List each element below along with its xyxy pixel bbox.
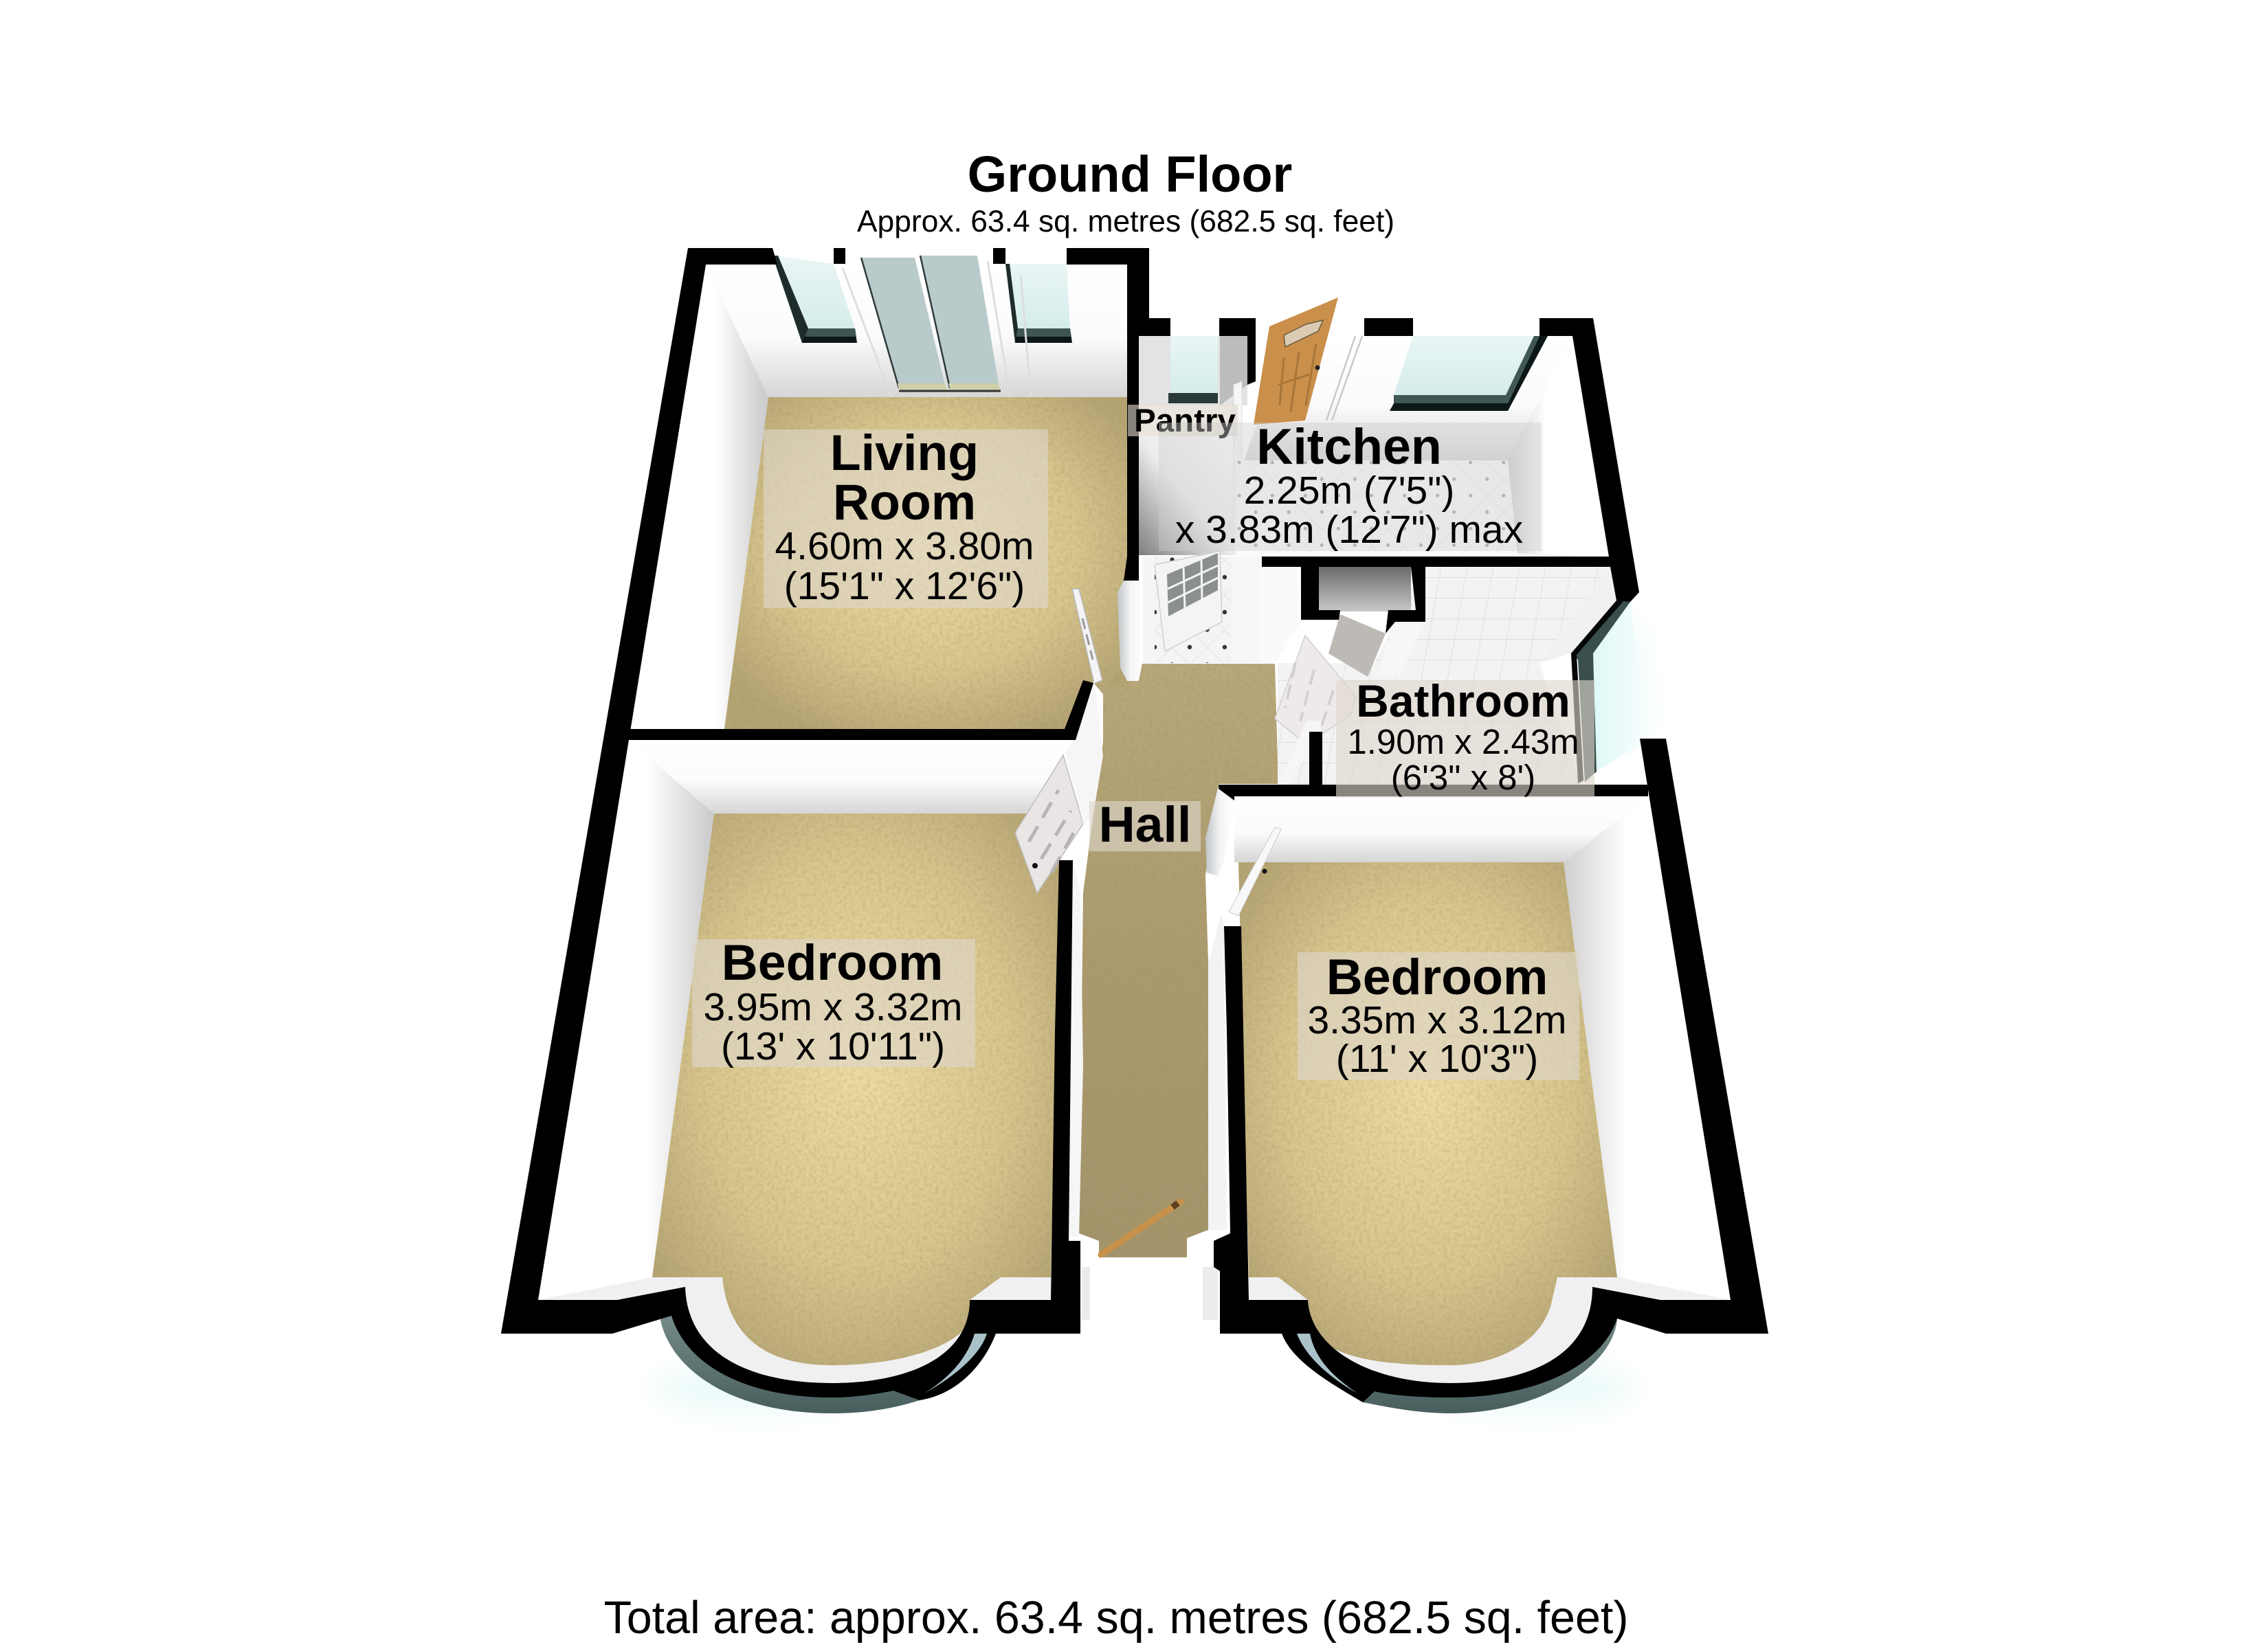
subtitle: floor area: Approx. 63.4 sq. metres (682.5 sq. feet) [857,205,1394,238]
exterior and interior black walls [501,248,1768,1402]
label: kitchen: Kitchen [1256,418,1442,475]
bedroom two right wall [1564,796,1731,1300]
bathroom window [1571,601,1648,783]
room: inner lobby and door [1118,551,1262,681]
bedroom one wall edge [1069,860,1083,1237]
label: bedroom two: 3.35m x 3.12m [1307,998,1567,1042]
label: bathroom [1336,675,1594,798]
cupboard front [1376,622,1425,677]
room: pantry [1139,336,1247,555]
label: bedroom one [692,934,975,1068]
room: bathroom [1261,567,1648,785]
label: living room: (15'1" x 12'6") [784,564,1025,608]
wall: bedroom two outer wall [1214,739,1768,1402]
wall: living room top right [1067,248,1149,265]
pantry lower wall [1139,436,1234,555]
living room back wall [706,265,1127,397]
wall: top stub right of patio door [993,248,1005,264]
label: living room [764,424,1048,608]
room: bedroom one [538,680,1103,1383]
label: kitchen: x 3.83m (12'7") max [1175,508,1523,552]
room: hall [1079,664,1278,1320]
wall: between living room and bedroom one [628,680,1093,740]
label: kitchen: 2.25m (7'5") [1244,469,1454,513]
hall door jamb [1205,788,1234,876]
label: bathroom: Bathroom [1356,675,1570,726]
pantry back wall [1139,336,1247,405]
bedroom one back wall [629,741,1062,814]
pantry door leaf [1234,381,1242,555]
label: living room: Living [830,424,979,481]
living room left wall [630,265,768,729]
bedroom two bay wall [1249,1277,1731,1383]
wall: top stub at patio door [834,248,845,264]
wall: cupboard [1301,567,1425,633]
pantry window [1168,336,1218,403]
bathroom tiled floor [1278,663,1581,785]
kitchen window [1390,326,1548,411]
patio doors [843,256,1031,397]
wall: central spine upper [1127,265,1149,336]
right window [1005,264,1072,343]
label: bedroom one: 3.95m x 3.32m [703,985,963,1029]
hall end jamb right [1203,1267,1218,1320]
label: bedroom two: (11' x 10'3") [1336,1037,1538,1081]
bedroom one door wall end [1065,680,1103,824]
bay window glass: bedroom one [660,1305,920,1413]
wall: kitchen top stub [1364,318,1413,336]
cupboard door [1328,614,1386,677]
label: kitchen [1159,418,1542,552]
front door frame [1326,336,1362,420]
living room carpet [724,397,1127,729]
label: bedroom one: (13' x 10'11") [721,1024,945,1068]
label: bathroom: (6'3" x 8') [1391,758,1535,797]
label: living room: Room [833,473,976,530]
front door edge [1101,1202,1181,1255]
bathroom tiled back wall [1375,567,1610,663]
wall: bedroom one and living room outer wall [501,248,1080,1400]
label: hall: Hall [1099,796,1191,853]
left door column [1143,557,1155,664]
footer: total area: Total area: approx. 63.4 sq. metres (682.5 sq. feet) [604,1593,1628,1644]
left door jamb [1118,581,1143,681]
bathroom wall end [1278,721,1321,785]
label: bedroom two [1298,948,1579,1081]
wall: central spine lower [1124,336,1139,581]
wall: pantry top right [1219,318,1256,385]
bedroom one bay wall [538,1277,1051,1383]
kitchen right wall [1508,336,1609,557]
bathroom left wall [1261,567,1301,663]
room: bedroom two [1205,788,1731,1383]
room: kitchen [1237,298,1609,557]
bedroom two door leaf [1229,827,1281,916]
label: bathroom: 1.90m x 2.43m [1347,722,1579,761]
window light glow [653,618,1649,1415]
label: bedroom one: Bedroom [722,934,943,991]
room: living room [630,256,1127,729]
kitchen tiled floor [1237,460,1517,557]
wall: bathroom partition [1309,732,1322,785]
bedroom two carpet [1238,862,1617,1365]
bay window glass: bedroom two [1363,1305,1617,1413]
lobby tiled floor [1143,557,1232,663]
wall: kitchen right and bathroom outer wall [1262,318,1639,602]
cupboard interior [1319,567,1411,612]
front door [1254,298,1338,425]
hall carpet [1079,664,1278,1257]
living room door leaf [1072,589,1102,684]
label: bedroom two: Bedroom [1326,948,1548,1005]
right door jamb [1232,557,1262,663]
bedroom one left wall [538,741,714,1300]
left window [772,256,857,343]
bedroom two wall edge [1208,914,1227,1230]
label: living room: 4.60m x 3.80m [775,524,1034,568]
bedroom one door leaf [1015,755,1083,893]
bedroom two back wall [1234,796,1648,862]
wall: bedroom two top [1219,785,1648,800]
bathroom door leaf [1275,636,1356,745]
bay window sliver: bedroom one [924,1334,987,1393]
bathroom right wall [1539,567,1616,663]
title: Ground Floor [968,146,1292,203]
lobby door leaf [1155,551,1222,651]
kitchen back wall [1244,336,1572,460]
wall: pantry top left [1127,318,1170,336]
hall end jamb left [1082,1267,1090,1320]
bay window sliver: bedroom two [1297,1334,1357,1393]
label: pantry: Pantry [1134,403,1236,439]
bedroom one carpet [652,814,1062,1365]
